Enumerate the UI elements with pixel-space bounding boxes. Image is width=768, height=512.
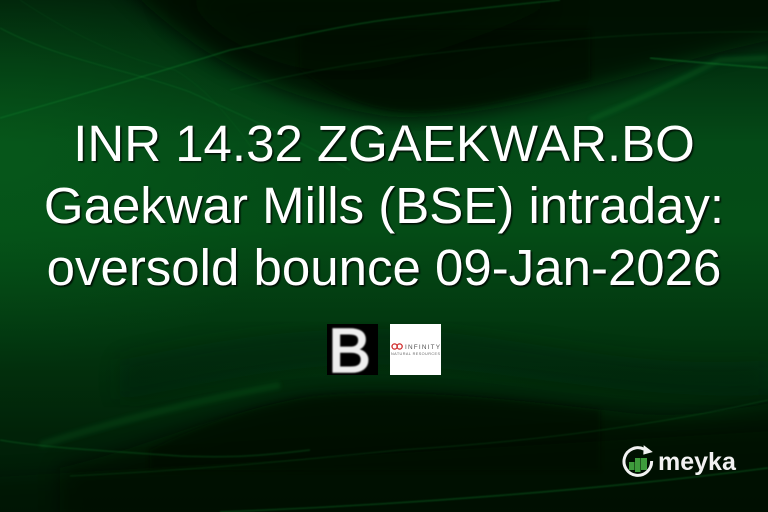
title: oversold bounce 09-Jan-2026 xyxy=(47,239,721,296)
title: INR 14.32 ZGAEKWAR.BO xyxy=(73,115,695,172)
icon: Infinity Natural Resources logo: INFINITY xyxy=(405,344,441,351)
top dark wave xyxy=(120,0,768,117)
icon: Infinity Natural Resources logo: NATURAL RESOURCES xyxy=(391,352,440,356)
title xyxy=(44,115,724,296)
title: Gaekwar Mills (BSE) intraday: xyxy=(44,177,724,234)
bottom dark wave xyxy=(60,393,768,512)
logo: meyka brand xyxy=(622,445,737,477)
wordmark: meyka xyxy=(658,448,737,476)
icon: Infinity Natural Resources logo xyxy=(390,324,441,375)
icon: circular arrow with green bars xyxy=(624,445,654,475)
